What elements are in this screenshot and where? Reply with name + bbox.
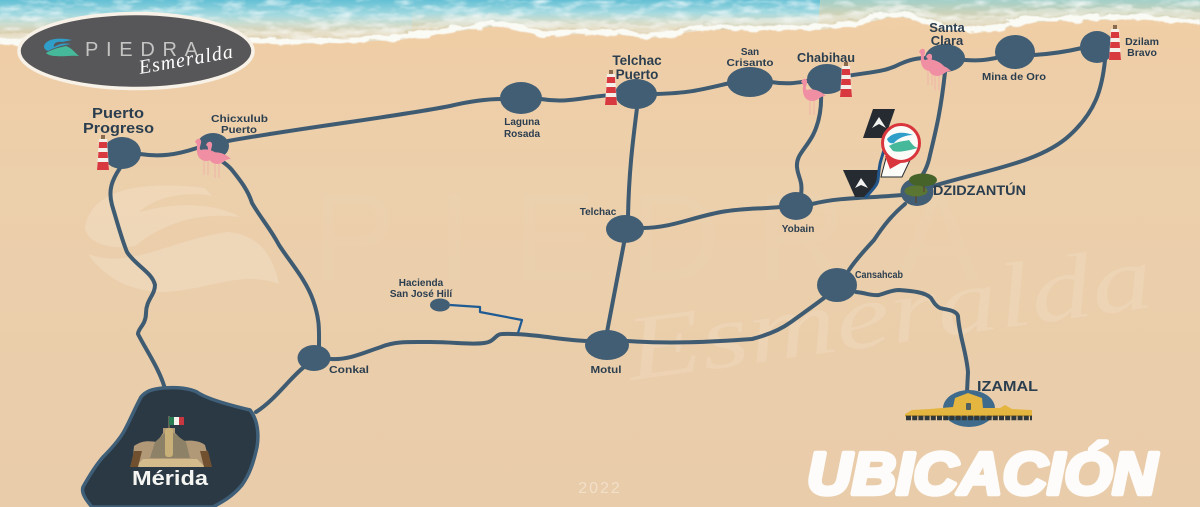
city labels [83,20,1159,395]
road into site [866,150,884,197]
city labels: Puerto [616,67,658,82]
city labels: Puerto [221,124,257,136]
icon: location pin [882,124,920,169]
city labels: Cansahcab [855,270,903,281]
city labels: San José Hilí [390,289,453,300]
city labels: Santa [929,20,965,35]
city labels: IZAMAL [977,378,1038,395]
city labels: Mina de Oro [982,71,1046,83]
icon: access sign south [843,170,880,197]
city nodes [103,31,1114,371]
icon: Mexican flag [169,416,184,428]
logo: Piedra Esmeralda [19,14,253,88]
year label: 2022 [578,480,622,497]
icon: lighthouse Telchac Puerto [605,70,617,105]
faint watermark: piedra esmeralda [85,168,1159,400]
city labels: Clara [931,33,964,48]
logo: Piedra Esmeralda: PIEDRA [85,39,199,61]
city labels: Yobain [782,224,814,235]
city labels: Puerto [92,105,144,122]
icon: flamingos Chicxulub [195,139,231,178]
icon: flamingo Chabihau [801,79,826,115]
city labels: Chicxulub [211,113,268,125]
logo: Piedra Esmeralda: Esmeralda [136,41,234,79]
title: Ubicación: UBICACIÓN [807,441,1158,507]
icon: lighthouse Progreso [97,135,109,170]
icon: monument to the fatherland [130,428,212,467]
road network [110,48,1105,412]
city labels: San [741,47,759,58]
icon: trees at Dzidzantún [904,174,937,203]
city labels: Hacienda [399,278,444,289]
city labels: Rosada [504,129,540,140]
icon: wave logo [44,39,79,56]
city labels: Conkal [329,364,369,376]
city labels: Progreso [83,120,154,137]
city: Mérida district [83,388,258,507]
development site: access markers and pin [843,109,920,197]
city labels: DZIDZANTÚN [933,181,1026,198]
icon: site parcel [881,158,911,177]
city labels: Telchac [580,207,617,218]
icon: flamingos Santa Clara [919,49,951,90]
city labels: Chabihau [797,50,855,65]
label: Mérida: Mérida [132,467,209,490]
icon: lighthouse Chabihau [840,62,852,97]
city labels: Motul [590,364,622,376]
icon: lighthouse Dzilam Bravo [1109,25,1121,60]
faint watermark: piedra esmeralda: PIEDRA [312,168,980,307]
city labels: Telchac [612,53,662,68]
city labels: Dzilam [1125,36,1159,48]
city labels: Laguna [504,117,540,128]
icon: Izamal convent [905,390,1032,427]
city labels: Crisanto [726,57,774,69]
icon: access sign north [863,109,895,138]
sea and foam at top edge [0,0,1200,46]
city labels: Bravo [1127,47,1157,59]
faint watermark: piedra esmeralda: Esmeralda [617,225,1159,400]
